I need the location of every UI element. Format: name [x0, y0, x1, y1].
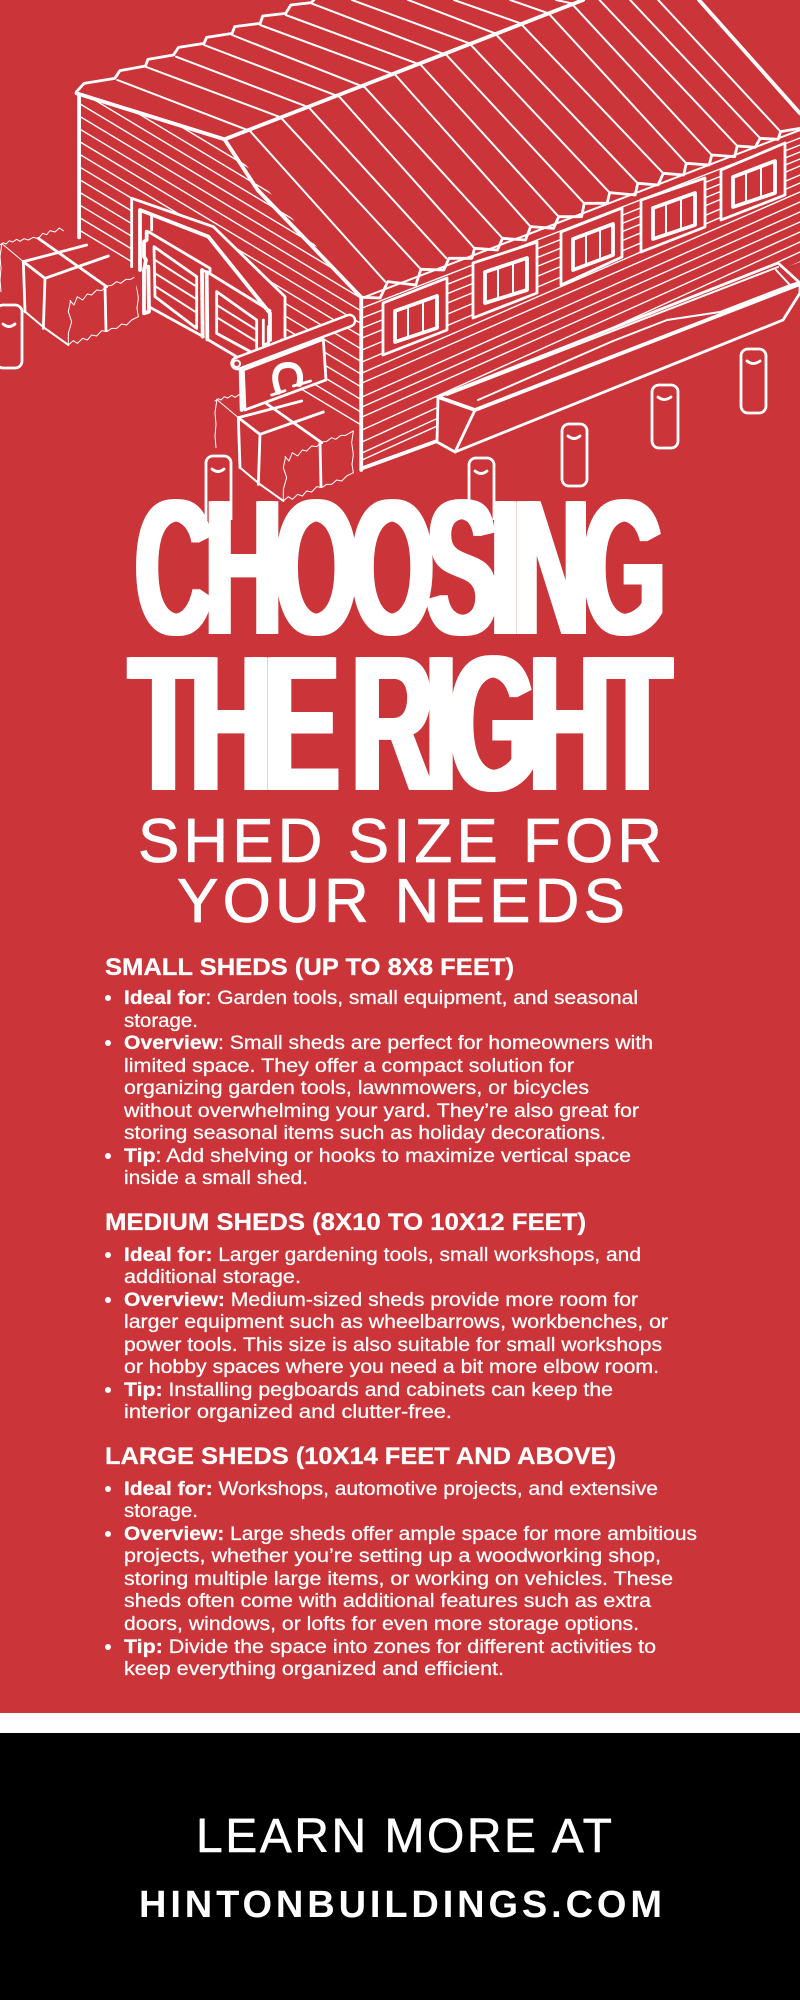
title line 2: THE RIGHT: [129, 615, 664, 831]
posts: [0, 305, 766, 528]
subtitle: SHED SIZE FOR: [138, 807, 662, 876]
list: large sheds: Tip: Divide the space into zones for different activities to: [124, 1637, 656, 1658]
section: small sheds: [105, 954, 653, 1189]
illustration: shed line drawing: [0, 0, 800, 520]
heading: large sheds: LARGE SHEDS (10X14 FEET AND ABOVE): [105, 1443, 616, 1470]
list: large sheds: sheds often come with additional features such as extra: [124, 1591, 651, 1612]
window 5: [721, 143, 785, 220]
roof: upper slope slats: [117, 0, 571, 131]
post 2: [206, 456, 231, 526]
list: small sheds: [105, 988, 653, 1189]
website: HINTONBUILDINGS.COM: [139, 1884, 662, 1926]
list: medium sheds: Tip: Installing pegboards and cabinets can keep the: [124, 1380, 613, 1401]
section: medium sheds: [105, 1209, 669, 1423]
roof: lower slope slats: [250, 0, 781, 282]
heading: medium sheds: MEDIUM SHEDS (8X10 TO 10X12 FEET): [105, 1209, 586, 1236]
list: small sheds: storing seasonal items such as holiday decorations.: [124, 1123, 606, 1144]
sign board: [241, 339, 326, 410]
list: medium sheds: power tools. This size is also suitable for small workshops: [124, 1335, 662, 1356]
list: large sheds: storing multiple large items, or working on vehicles. These: [124, 1569, 673, 1590]
window 2: [473, 242, 537, 318]
trough beam: [437, 263, 800, 452]
heading: small sheds: SMALL SHEDS (UP TO 8X8 FEET): [105, 954, 514, 981]
list: medium sheds: larger equipment such as wheelbarrows, workbenches, or: [124, 1312, 669, 1333]
list: large sheds: [105, 1479, 697, 1680]
icon: horseshoe: [272, 365, 311, 395]
window 4: [641, 178, 705, 252]
gable wall edges: [79, 95, 361, 470]
shed roof and gable wall: [77, 0, 800, 470]
window 1: [383, 278, 447, 355]
post 1: [0, 305, 22, 368]
side wall: [362, 130, 800, 468]
list: large sheds: projects, whether you’re setting up a woodworking shop,: [124, 1546, 661, 1567]
crate: front: [215, 384, 353, 501]
door: right leaf: [207, 272, 270, 357]
list: large sheds: Ideal for: Workshops, automotive projects, and extensive: [124, 1479, 658, 1500]
sign beam: [233, 321, 349, 367]
list: medium sheds: interior organized and clutter-free.: [124, 1402, 452, 1423]
call to action: LEARN MORE AT: [196, 1810, 612, 1863]
subtitle: [138, 807, 662, 936]
list: medium sheds: or hobby spaces where you need a bit more elbow room.: [124, 1357, 659, 1378]
window 3: [561, 208, 622, 285]
door frame: [132, 198, 285, 357]
eave line and base: [362, 130, 800, 468]
roof: scalloped edges, ridge and hip: [77, 0, 800, 298]
list: large sheds: keep everything organized and efficient.: [124, 1659, 504, 1680]
side wall siding: [362, 138, 800, 460]
title line 1: CHOOSING: [135, 459, 658, 675]
list: medium sheds: additional storage.: [124, 1267, 301, 1288]
footer band: [0, 1713, 800, 2000]
list: medium sheds: Overview: Medium-sized sheds provide more room for: [124, 1290, 639, 1311]
gable wall siding: [81, 100, 360, 425]
title: [126, 459, 674, 831]
list: small sheds: limited space. They offer a compact solution for: [124, 1056, 575, 1077]
list: medium sheds: Ideal for: Larger gardening tools, small workshops, and: [124, 1245, 641, 1266]
door: left leaf: [144, 232, 210, 337]
section: large sheds: [105, 1443, 697, 1680]
list: small sheds: Overview : Small sheds are perfect for homeowners with: [124, 1033, 653, 1054]
post 6: [741, 349, 766, 413]
subtitle: YOUR NEEDS: [177, 867, 625, 936]
post 4: [562, 424, 587, 486]
door, sign and crates: [0, 198, 353, 501]
list: large sheds: storage.: [124, 1501, 198, 1522]
list: small sheds: Ideal for : Garden tools, small equipment, and seasonal: [124, 988, 638, 1009]
list: large sheds: doors, windows, or lofts for even more storage options.: [124, 1614, 639, 1635]
list: large sheds: Overview: Large sheds offer ample space for more ambitious: [124, 1524, 697, 1545]
list: small sheds: Tip: Add shelving or hooks to maximize vertical space: [124, 1146, 631, 1167]
list: small sheds: inside a small shed.: [124, 1168, 308, 1189]
list: small sheds: without overwhelming your yard. They’re also great for: [123, 1101, 640, 1122]
crate: left: [0, 228, 138, 345]
post 5: [652, 385, 678, 448]
list: medium sheds: [105, 1245, 669, 1423]
list: small sheds: organizing garden tools, lawnmowers, or bicycles: [124, 1078, 589, 1099]
post 3: [469, 458, 494, 528]
list: small sheds: storage.: [124, 1011, 198, 1032]
